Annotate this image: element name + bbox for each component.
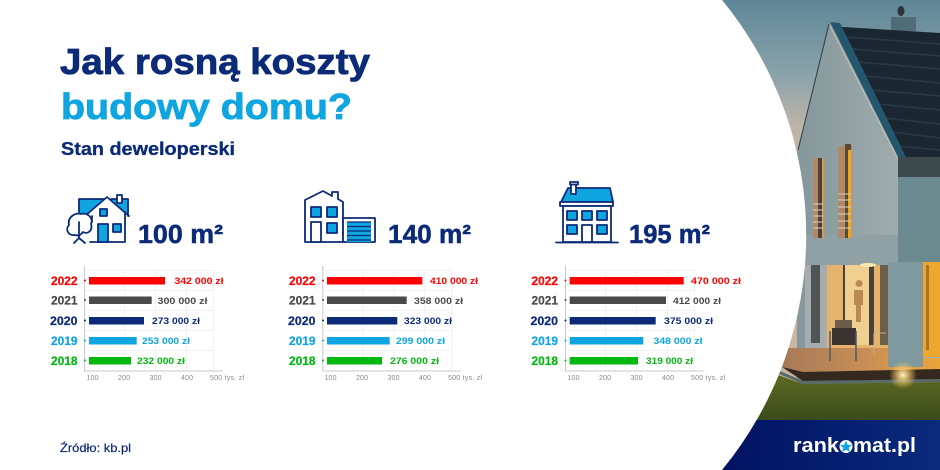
bar chart: 195 m2: 100	[568, 375, 580, 382]
bar chart: 100 m2: 2019	[51, 336, 78, 348]
bar chart: 195 m2: 319 000 zł	[646, 356, 693, 367]
subtitle: Stan deweloperski	[61, 139, 235, 159]
bar chart: 100 m2: 2018	[51, 356, 78, 368]
icon: house with garage	[305, 191, 375, 242]
bar chart: 140 m2: 2021	[289, 296, 316, 308]
person in doorway	[854, 280, 863, 322]
bar chart: 195 m2: 348 000 zł	[654, 336, 703, 347]
bar chart: 195 m2: 2021	[532, 296, 559, 308]
bar chart: 195 m2: 2018	[532, 356, 559, 368]
title: Jak rosną koszty	[60, 41, 370, 82]
bar chart: 195 m2	[530, 266, 741, 382]
bar chart: 195 m2: 300	[630, 375, 643, 382]
bar chart: 140 m2: 358 000 zł	[414, 296, 463, 307]
bar chart: 100 m2: 2021	[51, 296, 78, 308]
bar chart: 140 m2: 200	[356, 375, 368, 382]
heading: 195 m2: 195 m²	[629, 221, 710, 249]
bar chart: 100 m2: 2020	[50, 316, 78, 328]
bar chart: 195 m2: 200	[599, 375, 611, 382]
bar chart: 195 m2: 375 000 zł	[664, 316, 713, 327]
photo: house at dusk	[700, 0, 940, 421]
bar chart: 140 m2: 2020	[288, 316, 316, 328]
bar chart: 140 m2: 500 tys. zł	[448, 375, 482, 382]
heading: 140 m2: 140 m²	[388, 221, 471, 249]
panel: 195 m2	[530, 182, 741, 382]
bar chart: 140 m2: 100	[324, 375, 337, 382]
bar chart: 195 m2: 2019	[532, 336, 558, 348]
chairs	[830, 320, 886, 361]
bar chart: 195 m2: 2020	[530, 316, 558, 328]
bar chart: 100 m2: 342 000 zł	[174, 276, 224, 287]
bar chart: 100 m2	[50, 266, 244, 382]
panel: 100 m2	[50, 195, 244, 382]
bar chart: 140 m2: 300	[388, 375, 400, 382]
bar chart: 140 m2: 276 000 zł	[390, 356, 439, 367]
bar chart: 100 m2: 500 tys. zł	[210, 375, 244, 382]
title: budowy domu?	[61, 86, 352, 127]
banner: navy band	[700, 420, 940, 470]
bar chart: 195 m2: 470 000 zł	[691, 276, 741, 287]
source note: Źródło: kb.pl	[60, 440, 131, 455]
bar chart: 140 m2: 2019	[289, 336, 316, 348]
bar chart: 140 m2: 2022	[289, 276, 316, 288]
bar chart: 100 m2: 400	[181, 375, 193, 382]
logo: rankomat.pl	[793, 435, 916, 457]
bar chart: 100 m2: 232 000 zł	[137, 356, 185, 367]
logo: rankomat.pl: rank	[793, 435, 840, 457]
terrace deck	[782, 348, 940, 375]
heading: 100 m2: 100 m²	[138, 221, 223, 249]
icon: house with tree	[67, 195, 129, 243]
bar chart: 100 m2: 273 000 zł	[152, 316, 200, 327]
bar chart: 100 m2: 300	[150, 375, 162, 382]
bar chart: 140 m2: 410 000 zł	[430, 276, 478, 287]
bar chart: 140 m2: 323 000 zł	[404, 316, 452, 327]
icon: large house	[556, 182, 618, 242]
logo: rankomat.pl: mat.pl	[853, 435, 916, 457]
bar chart: 100 m2: 253 000 zł	[142, 336, 190, 347]
bar chart: 100 m2: 200	[118, 375, 130, 382]
bar chart: 195 m2: 2022	[532, 276, 558, 288]
bar chart: 140 m2	[288, 266, 482, 382]
bar chart: 140 m2: 400	[419, 375, 431, 382]
bar chart: 140 m2: 299 000 zł	[396, 336, 445, 347]
bar chart: 140 m2: 2018	[289, 356, 316, 368]
lawn	[750, 375, 940, 421]
bar chart: 100 m2: 300 000 zł	[158, 296, 208, 307]
bar chart: 195 m2: 500 tys. zł	[691, 375, 725, 382]
bar chart: 195 m2: 400	[662, 375, 674, 382]
panel: 140 m2	[288, 191, 482, 382]
title	[60, 41, 370, 127]
bar chart: 100 m2: 2022	[51, 276, 78, 288]
bar chart: 100 m2: 100	[86, 375, 99, 382]
bar chart: 195 m2: 412 000 zł	[673, 296, 721, 307]
